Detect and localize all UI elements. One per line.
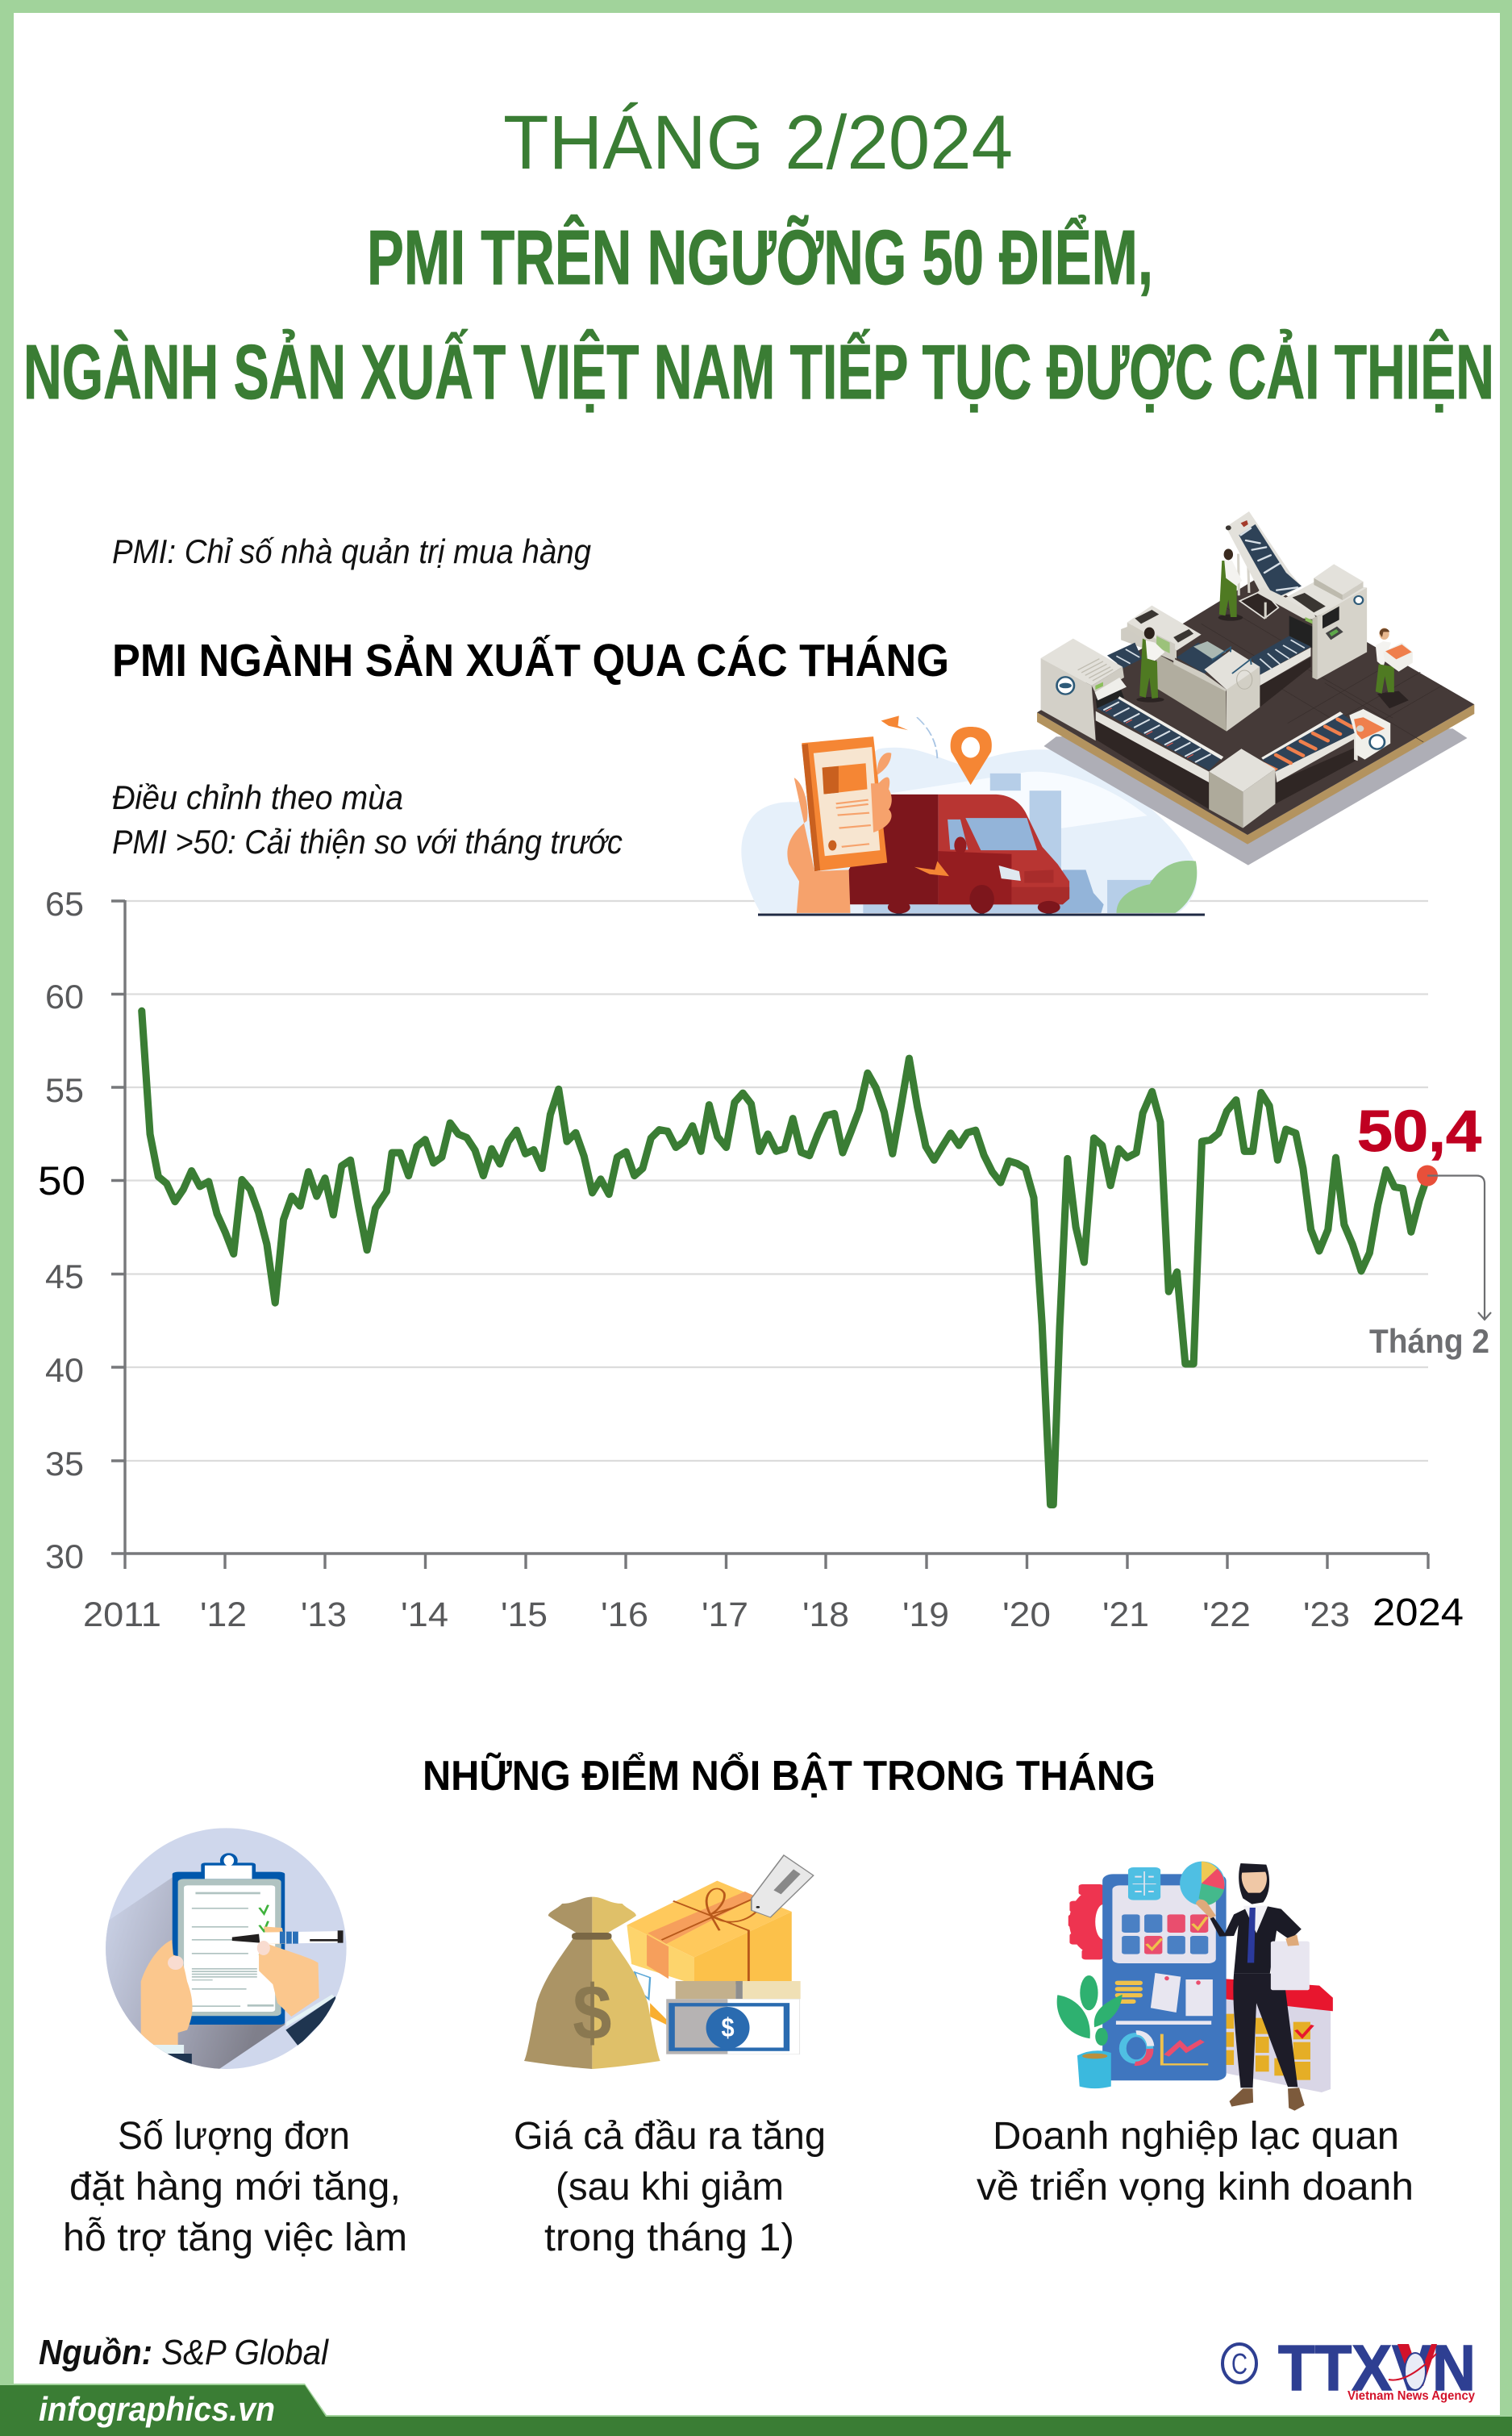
x axis labels: '15 bbox=[501, 1595, 548, 1634]
bush bbox=[1117, 861, 1197, 913]
calendar bbox=[1225, 1979, 1333, 2092]
logo: TTXVN: C bbox=[1231, 2347, 1248, 2380]
x axis labels: '18 bbox=[802, 1595, 849, 1634]
highlight text: new orders bbox=[63, 2115, 407, 2259]
worker top bbox=[1218, 549, 1243, 621]
y axis labels: 65 bbox=[45, 885, 84, 923]
y axis labels bbox=[38, 885, 85, 1575]
back left machine bbox=[1107, 606, 1202, 668]
x axis labels: '12 bbox=[200, 1595, 247, 1634]
highlight text: output prices: Giá cả đầu ra tăng bbox=[514, 2115, 826, 2158]
paper plane bbox=[881, 715, 908, 730]
sleeves bbox=[152, 1995, 338, 2067]
value callout 50,4: Tháng 2 bbox=[1369, 1322, 1489, 1360]
left conveyor bbox=[1096, 696, 1223, 782]
platform bbox=[1037, 578, 1474, 845]
highlight text: output prices: (sau khi giảm bbox=[556, 2166, 784, 2209]
worker left bbox=[1136, 628, 1164, 703]
notes bbox=[1115, 1973, 1213, 2025]
x axis labels: '21 bbox=[1102, 1595, 1149, 1634]
clipboard bbox=[173, 1854, 285, 2025]
icon: clipboard with hands bbox=[102, 1828, 347, 2071]
calculator bbox=[1128, 1867, 1160, 1900]
x axis labels: '22 bbox=[1202, 1595, 1251, 1634]
title bbox=[23, 100, 1494, 415]
pen bbox=[232, 1930, 344, 1944]
chart notes: PMI >50: Cải thiện so với tháng trước bbox=[112, 823, 623, 861]
x axis labels bbox=[83, 1591, 1464, 1634]
chart gridlines and axes bbox=[111, 900, 1428, 1569]
value callout 50,4 bbox=[1357, 1099, 1491, 1360]
light band bbox=[889, 772, 1148, 828]
highlight text: new orders: hỗ trợ tăng việc làm bbox=[63, 2216, 407, 2259]
highlight text: new orders: đặt hàng mới tăng, bbox=[69, 2166, 401, 2209]
PMI definition note: PMI: Chỉ số nhà quản trị mua hàng bbox=[112, 532, 591, 570]
y axis labels: 40 bbox=[45, 1351, 84, 1389]
upper conveyor bbox=[1226, 511, 1302, 600]
bank notes: $ bbox=[722, 2013, 735, 2042]
right conveyor bbox=[1261, 711, 1364, 782]
pie chart bbox=[1180, 1862, 1225, 1905]
floor shadow bbox=[1043, 728, 1468, 866]
footer banner bbox=[0, 2384, 1512, 2436]
stand under upper conveyor bbox=[1239, 554, 1278, 619]
highlight text: new orders: Số lượng đơn bbox=[118, 2115, 350, 2158]
chart notes bbox=[112, 778, 623, 861]
title: PMI TRÊN NGƯỠNG 50 ĐIỂM, bbox=[367, 214, 1153, 301]
title: THÁNG 2/2024 bbox=[503, 100, 1013, 186]
chart notes: Điều chỉnh theo mùa bbox=[112, 778, 403, 816]
icon: businessman with planning app bbox=[1057, 1862, 1333, 2111]
x axis labels: '23 bbox=[1303, 1595, 1350, 1634]
parcel bbox=[627, 1881, 792, 1984]
y axis labels: 30 bbox=[45, 1537, 84, 1575]
illustration: factory production line bbox=[1037, 511, 1474, 866]
worker right bbox=[1376, 628, 1413, 708]
background city bbox=[863, 774, 1153, 913]
right hand behind pen bbox=[264, 1926, 285, 1944]
hand bbox=[787, 778, 851, 913]
highlight text: output prices bbox=[514, 2115, 826, 2259]
x axis labels: 2011 bbox=[83, 1595, 161, 1634]
left machine box bbox=[1041, 639, 1127, 740]
tablet bbox=[1102, 1874, 1227, 2080]
x axis labels: '14 bbox=[401, 1595, 448, 1634]
bank notes bbox=[666, 1981, 801, 2054]
money bag bbox=[524, 1897, 660, 2069]
y axis labels: 45 bbox=[45, 1258, 84, 1295]
money bag: $ bbox=[573, 1969, 611, 2056]
central machine bbox=[1156, 635, 1260, 732]
gear bbox=[1068, 1884, 1129, 1959]
chart heading: PMI NGÀNH SẢN XUẤT QUA CÁC THÁNG bbox=[112, 634, 949, 686]
x axis labels: '16 bbox=[601, 1595, 648, 1634]
highlight text: business outlook: về triển vọng kinh doanh bbox=[977, 2166, 1414, 2209]
x axis labels: 2024 bbox=[1372, 1591, 1464, 1634]
chart line: PMI series bbox=[142, 1011, 1427, 1504]
background blob bbox=[741, 748, 1198, 913]
illustration: delivery truck and phone bbox=[741, 715, 1198, 914]
fingers bbox=[871, 753, 892, 832]
salmon crate bbox=[1349, 709, 1390, 760]
background car bbox=[1048, 870, 1104, 913]
x axis labels: '17 bbox=[702, 1595, 748, 1634]
icon: money bag and parcel bbox=[524, 1855, 814, 2069]
highlight text: business outlook: Doanh nghiệp lạc quan bbox=[993, 2115, 1399, 2158]
highlight text: business outlook bbox=[977, 2115, 1414, 2209]
highlights heading: NHỮNG ĐIỂM NỔI BẬT TRONG THÁNG bbox=[423, 1752, 1156, 1800]
logo: TTXVN: Vietnam News Agency bbox=[1347, 2389, 1475, 2403]
donut and growth chart bbox=[1123, 2033, 1208, 2064]
price tag bbox=[752, 1855, 814, 1917]
truck bbox=[849, 795, 1069, 914]
footer banner: infographics.vn bbox=[39, 2390, 275, 2428]
location pin bbox=[951, 727, 992, 785]
y axis labels: 35 bbox=[45, 1445, 84, 1483]
highlight text: output prices: trong tháng 1) bbox=[544, 2217, 794, 2259]
phone bbox=[802, 736, 887, 871]
hands bbox=[141, 1940, 319, 2045]
y axis labels: 60 bbox=[45, 978, 84, 1016]
y axis labels: 55 bbox=[45, 1071, 84, 1109]
businessman bbox=[1196, 1863, 1310, 2111]
x axis labels: '13 bbox=[301, 1595, 347, 1634]
arm of right machine bbox=[1257, 586, 1317, 619]
x axis labels: '20 bbox=[1002, 1595, 1051, 1634]
bottom machine box bbox=[1209, 749, 1275, 828]
right machine bbox=[1285, 564, 1367, 680]
plant bbox=[1057, 1975, 1123, 2088]
value callout 50,4: 50,4 bbox=[1357, 1099, 1481, 1164]
x axis labels: '19 bbox=[902, 1595, 949, 1634]
ground line bbox=[758, 913, 1205, 916]
y axis labels: 50 bbox=[38, 1158, 85, 1203]
inner conveyor bbox=[1252, 615, 1312, 686]
logo: TTXVN: TTXVN bbox=[1278, 2332, 1476, 2404]
source: Nguồn: S&P Global bbox=[39, 2333, 329, 2372]
parcel label bbox=[631, 1964, 676, 2022]
